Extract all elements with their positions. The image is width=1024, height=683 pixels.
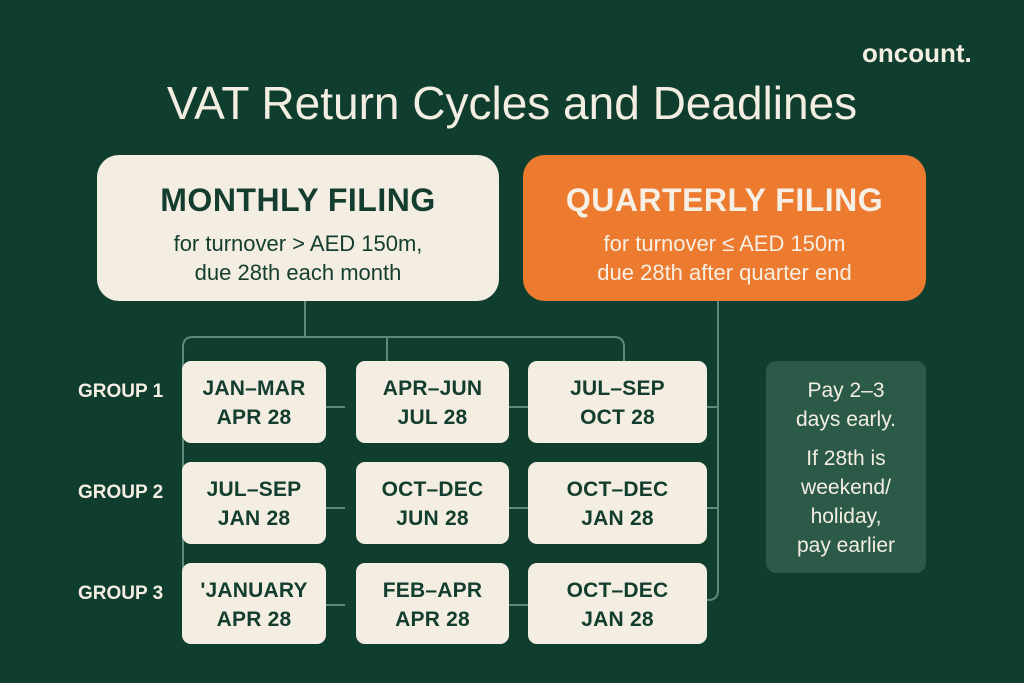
group labels: GROUP 1: [78, 381, 163, 402]
text: GROUP 2: [78, 482, 163, 503]
text: JAN 28: [581, 507, 654, 530]
text: JUL 28: [398, 406, 467, 429]
text: JAN 28: [581, 608, 654, 631]
logo: oncount.: [862, 38, 972, 68]
group 1 cells: APR 28: [217, 406, 291, 429]
group 2 cells: JUL–SEP: [207, 478, 301, 501]
text: OCT–DEC: [382, 478, 483, 501]
group 3 cells: 'JANUARY: [200, 579, 308, 602]
group 2 cells: JAN 28: [218, 507, 290, 530]
callout: pay early note: holiday,: [811, 505, 881, 528]
text: OCT–DEC: [567, 579, 668, 602]
text: APR–JUN: [383, 377, 482, 400]
panel: quarterly filing: due 28th after quarter end: [597, 260, 852, 285]
text: JUL–SEP: [570, 377, 665, 400]
panel: quarterly filing: QUARTERLY FILING: [566, 182, 883, 218]
group 2 cells: [182, 462, 326, 544]
group 3 cells: [182, 563, 326, 644]
group 1 cells: [182, 361, 326, 443]
group 3 cells: APR 28: [217, 608, 291, 631]
callout: pay early note: pay earlier: [797, 534, 895, 557]
panel: monthly filing: [97, 155, 499, 301]
panel: monthly filing: for turnover > AED 150m,: [174, 231, 422, 256]
title: VAT Return Cycles and Deadlines: [167, 77, 857, 129]
callout: pay early note: days early.: [796, 408, 896, 431]
panel: quarterly filing: [523, 155, 926, 301]
callout: pay early note: Pay 2–3: [807, 379, 885, 402]
text: OCT 28: [580, 406, 655, 429]
panel: monthly filing: due 28th each month: [195, 260, 401, 285]
text: GROUP 3: [78, 583, 163, 604]
panel: monthly filing: MONTHLY FILING: [160, 182, 436, 218]
panel: quarterly filing: for turnover ≤ AED 150m: [604, 231, 845, 256]
callout: pay early note: If 28th is: [806, 447, 886, 470]
callout: pay early note: weekend/: [801, 476, 891, 499]
text: JUN 28: [396, 507, 469, 530]
group 1 cells: JAN–MAR: [203, 377, 305, 400]
callout: pay early note: [766, 361, 926, 573]
text: FEB–APR: [383, 579, 482, 602]
text: OCT–DEC: [567, 478, 668, 501]
text: APR 28: [395, 608, 470, 631]
